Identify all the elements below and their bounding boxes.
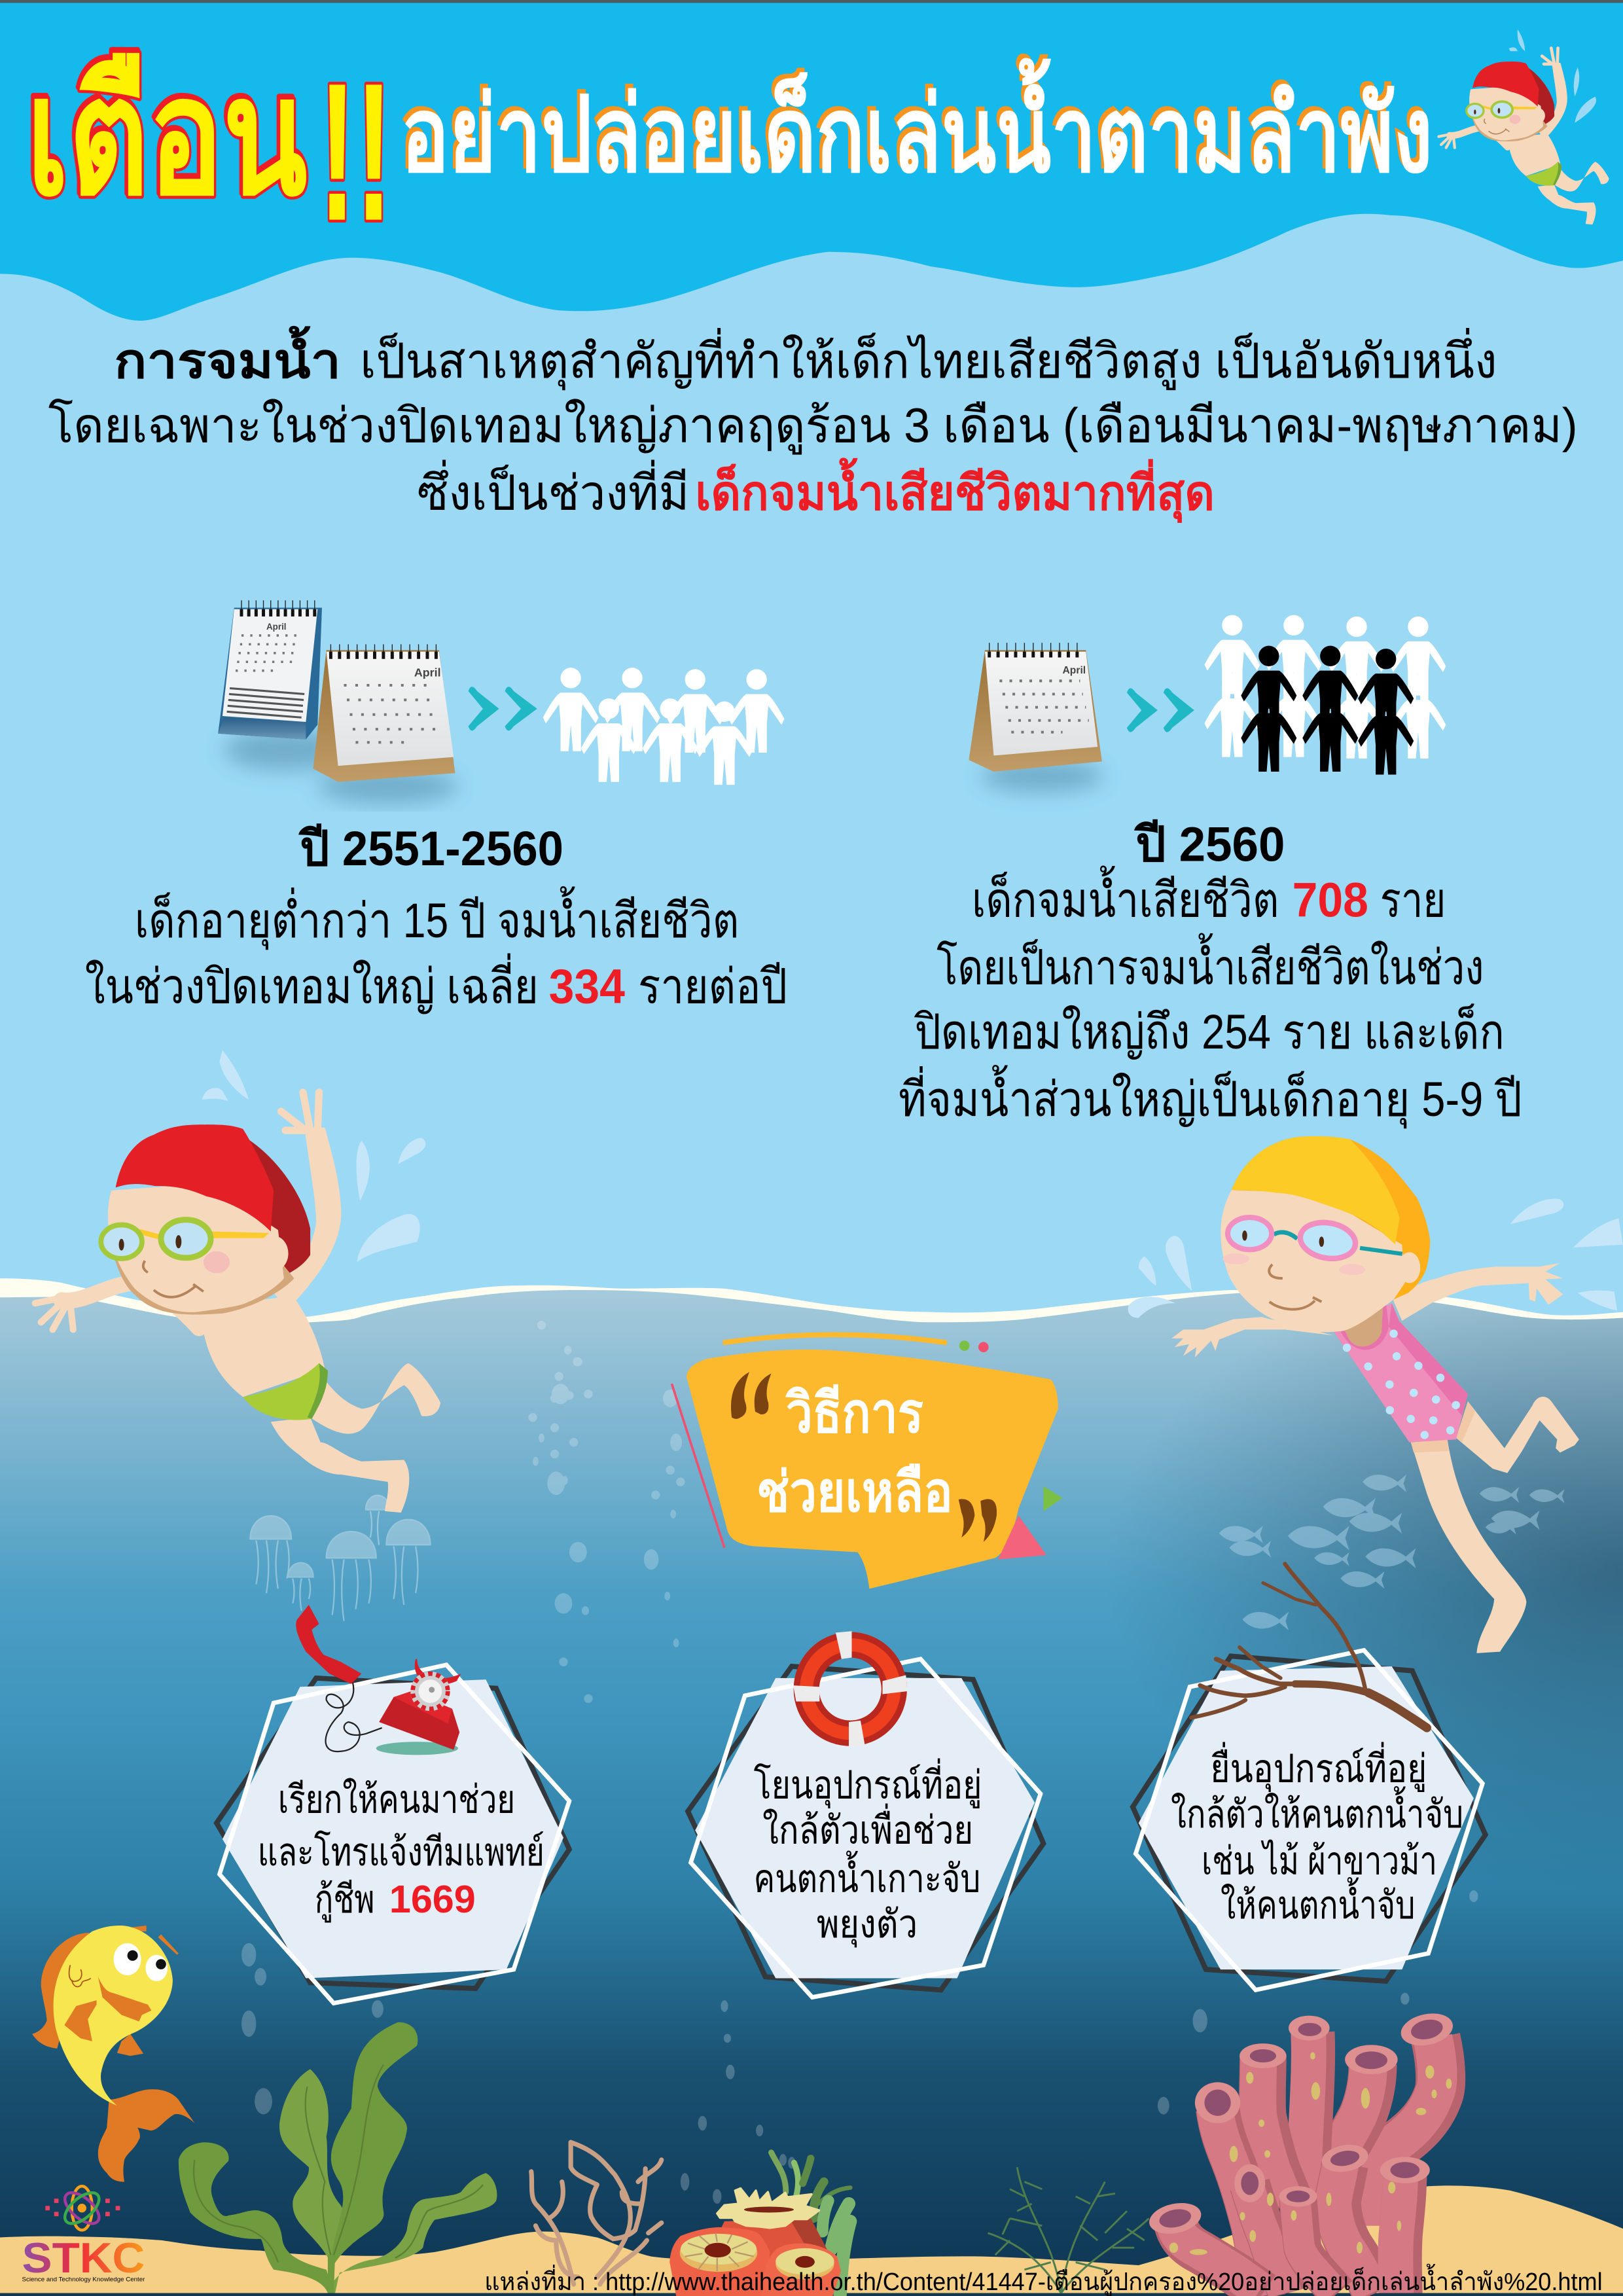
stat text right: ที่จมน้ำส่วนใหญ่เป็นเด็กอายุ 5-9 ปี <box>899 1065 1522 1129</box>
fish school <box>1219 1475 1565 1630</box>
intro paragraph: โดยเฉพาะในช่วงปิดเทอมใหญ่ภาคฤดูร้อน 3 เดือน (เดือนมีนาคม-พฤษภาคม) <box>48 399 1578 455</box>
stat text right: ราย <box>1380 873 1446 927</box>
stat text right: ปิดเทอมใหญ่ถึง 254 ราย และเด็ก <box>914 1004 1505 1060</box>
top band with waves <box>0 3 1623 321</box>
stat text left: ในช่วงปิดเทอมใหญ่ เฉลี่ย <box>85 953 539 1014</box>
title warning: !! <box>319 43 392 262</box>
green fronds behind anemone <box>772 2153 850 2296</box>
title warning: เตือน <box>26 45 308 228</box>
text: throw <box>754 1758 982 1948</box>
text: extend: ใกล้ตัวให้คนตกน้ำจับ <box>1171 1786 1463 1836</box>
icon: tan calendar right <box>969 643 1102 772</box>
text: throw: โยนอุปกรณ์ที่อยู่ <box>754 1758 982 1808</box>
banner: help methods: ช่วยเหลือ <box>757 1462 953 1524</box>
text: extend <box>1171 1742 1463 1927</box>
stat text left: ปี 2551-2560 <box>298 821 563 876</box>
pale coral <box>531 2142 662 2284</box>
intro paragraph: เป็นสาเหตุสำคัญที่ทำให้เด็กไทยเสียชีวิตสูง เป็นอันดับหนึ่ง <box>360 328 1497 391</box>
banner: help methods: วิธีการ <box>785 1382 923 1444</box>
text: call <box>258 1778 544 1923</box>
big boy swimmer <box>35 1050 440 1513</box>
small swimmer illustration <box>1438 29 1609 224</box>
stat text left: รายต่อปี <box>638 959 787 1014</box>
text: call: และโทรแจ้งทีมแพทย์ <box>258 1830 544 1874</box>
icon: blue calendar: April <box>266 622 287 632</box>
intro paragraph: เด็กจมน้ำเสียชีวิตมากที่สุด <box>695 457 1215 524</box>
panel: call for help <box>217 1605 569 2003</box>
panel: throw float <box>688 1631 1043 1998</box>
text: throw: ใกล้ตัวเพื่อช่วย <box>762 1804 973 1852</box>
intro paragraph: ซึ่งเป็นช่วงที่มี <box>417 460 689 520</box>
icon: blue calendar <box>218 600 322 740</box>
underwater background <box>0 1289 1623 2296</box>
stat text left: เด็กอายุต่ำกว่า 15 ปี จมน้ำเสียชีวิต <box>135 886 739 950</box>
icon: branch <box>1191 1564 1427 1728</box>
logo: STKC: STKC <box>22 2234 145 2282</box>
banner arc <box>723 1335 947 1343</box>
panel: extend stick <box>1133 1564 1486 1990</box>
icon: red telephone <box>296 1605 461 1755</box>
text: extend: ยื่นอุปกรณ์ที่อยู่ <box>1210 1742 1427 1793</box>
people group left <box>543 668 785 785</box>
people group right <box>1204 615 1446 775</box>
icon: tan calendar <box>313 644 455 782</box>
water surface cream wave <box>0 1278 1623 1324</box>
splash drops <box>1128 1199 1623 1318</box>
stat text left: 334 <box>549 959 625 1014</box>
text: call: 1669 <box>389 1877 476 1921</box>
shadows under calendars <box>224 729 1103 804</box>
pink tube coral <box>1173 2032 1440 2296</box>
logo: STKC: Science and Technology Knowledge Center <box>22 2276 145 2283</box>
arrows: right chevrons <box>1127 689 1194 732</box>
bubbles <box>241 1321 1478 2263</box>
icon: life ring <box>793 1631 907 1747</box>
anemone coral <box>669 2153 850 2296</box>
girl swimmer <box>1128 1136 1623 1653</box>
text: throw: คนตกน้ำเกาะจับ <box>754 1851 980 1901</box>
icon: tan calendar: April <box>414 666 441 679</box>
intro paragraph: การจมน้ำ <box>114 325 341 388</box>
stat text right: 708 <box>1293 873 1368 927</box>
intro paragraph <box>48 325 1578 524</box>
stat text right: ปี 2560 <box>1133 817 1285 872</box>
jellyfish <box>250 1496 430 1621</box>
text: extend: เช่น ไม้ ผ้าขาวม้า <box>1202 1839 1437 1883</box>
logo emblem <box>45 2186 120 2230</box>
icon: tan calendar right: April <box>1063 665 1086 676</box>
dark green seaweed bush <box>988 2167 1149 2293</box>
banner: help methods <box>671 1335 1063 1588</box>
stat text left <box>85 821 787 1014</box>
seaweed <box>179 2022 497 2293</box>
text: call: เรียกให้คนมาช่วย <box>278 1778 515 1821</box>
arrows: left chevrons <box>469 687 537 730</box>
text: throw: พยุงตัว <box>817 1902 918 1948</box>
stat text right: เด็กจมน้ำเสียชีวิต <box>972 865 1279 927</box>
yellow fish <box>32 1926 194 2181</box>
logo: STKC <box>22 2186 145 2283</box>
stat text right <box>899 817 1522 1129</box>
icon: sand seabed <box>0 2185 1623 2293</box>
stat text right: โดยเป็นการจมน้ำเสียชีวิตในช่วง <box>936 933 1484 994</box>
text: call: กู้ชีพ <box>315 1877 374 1923</box>
text: extend: ให้คนตกน้ำจับ <box>1221 1877 1415 1927</box>
